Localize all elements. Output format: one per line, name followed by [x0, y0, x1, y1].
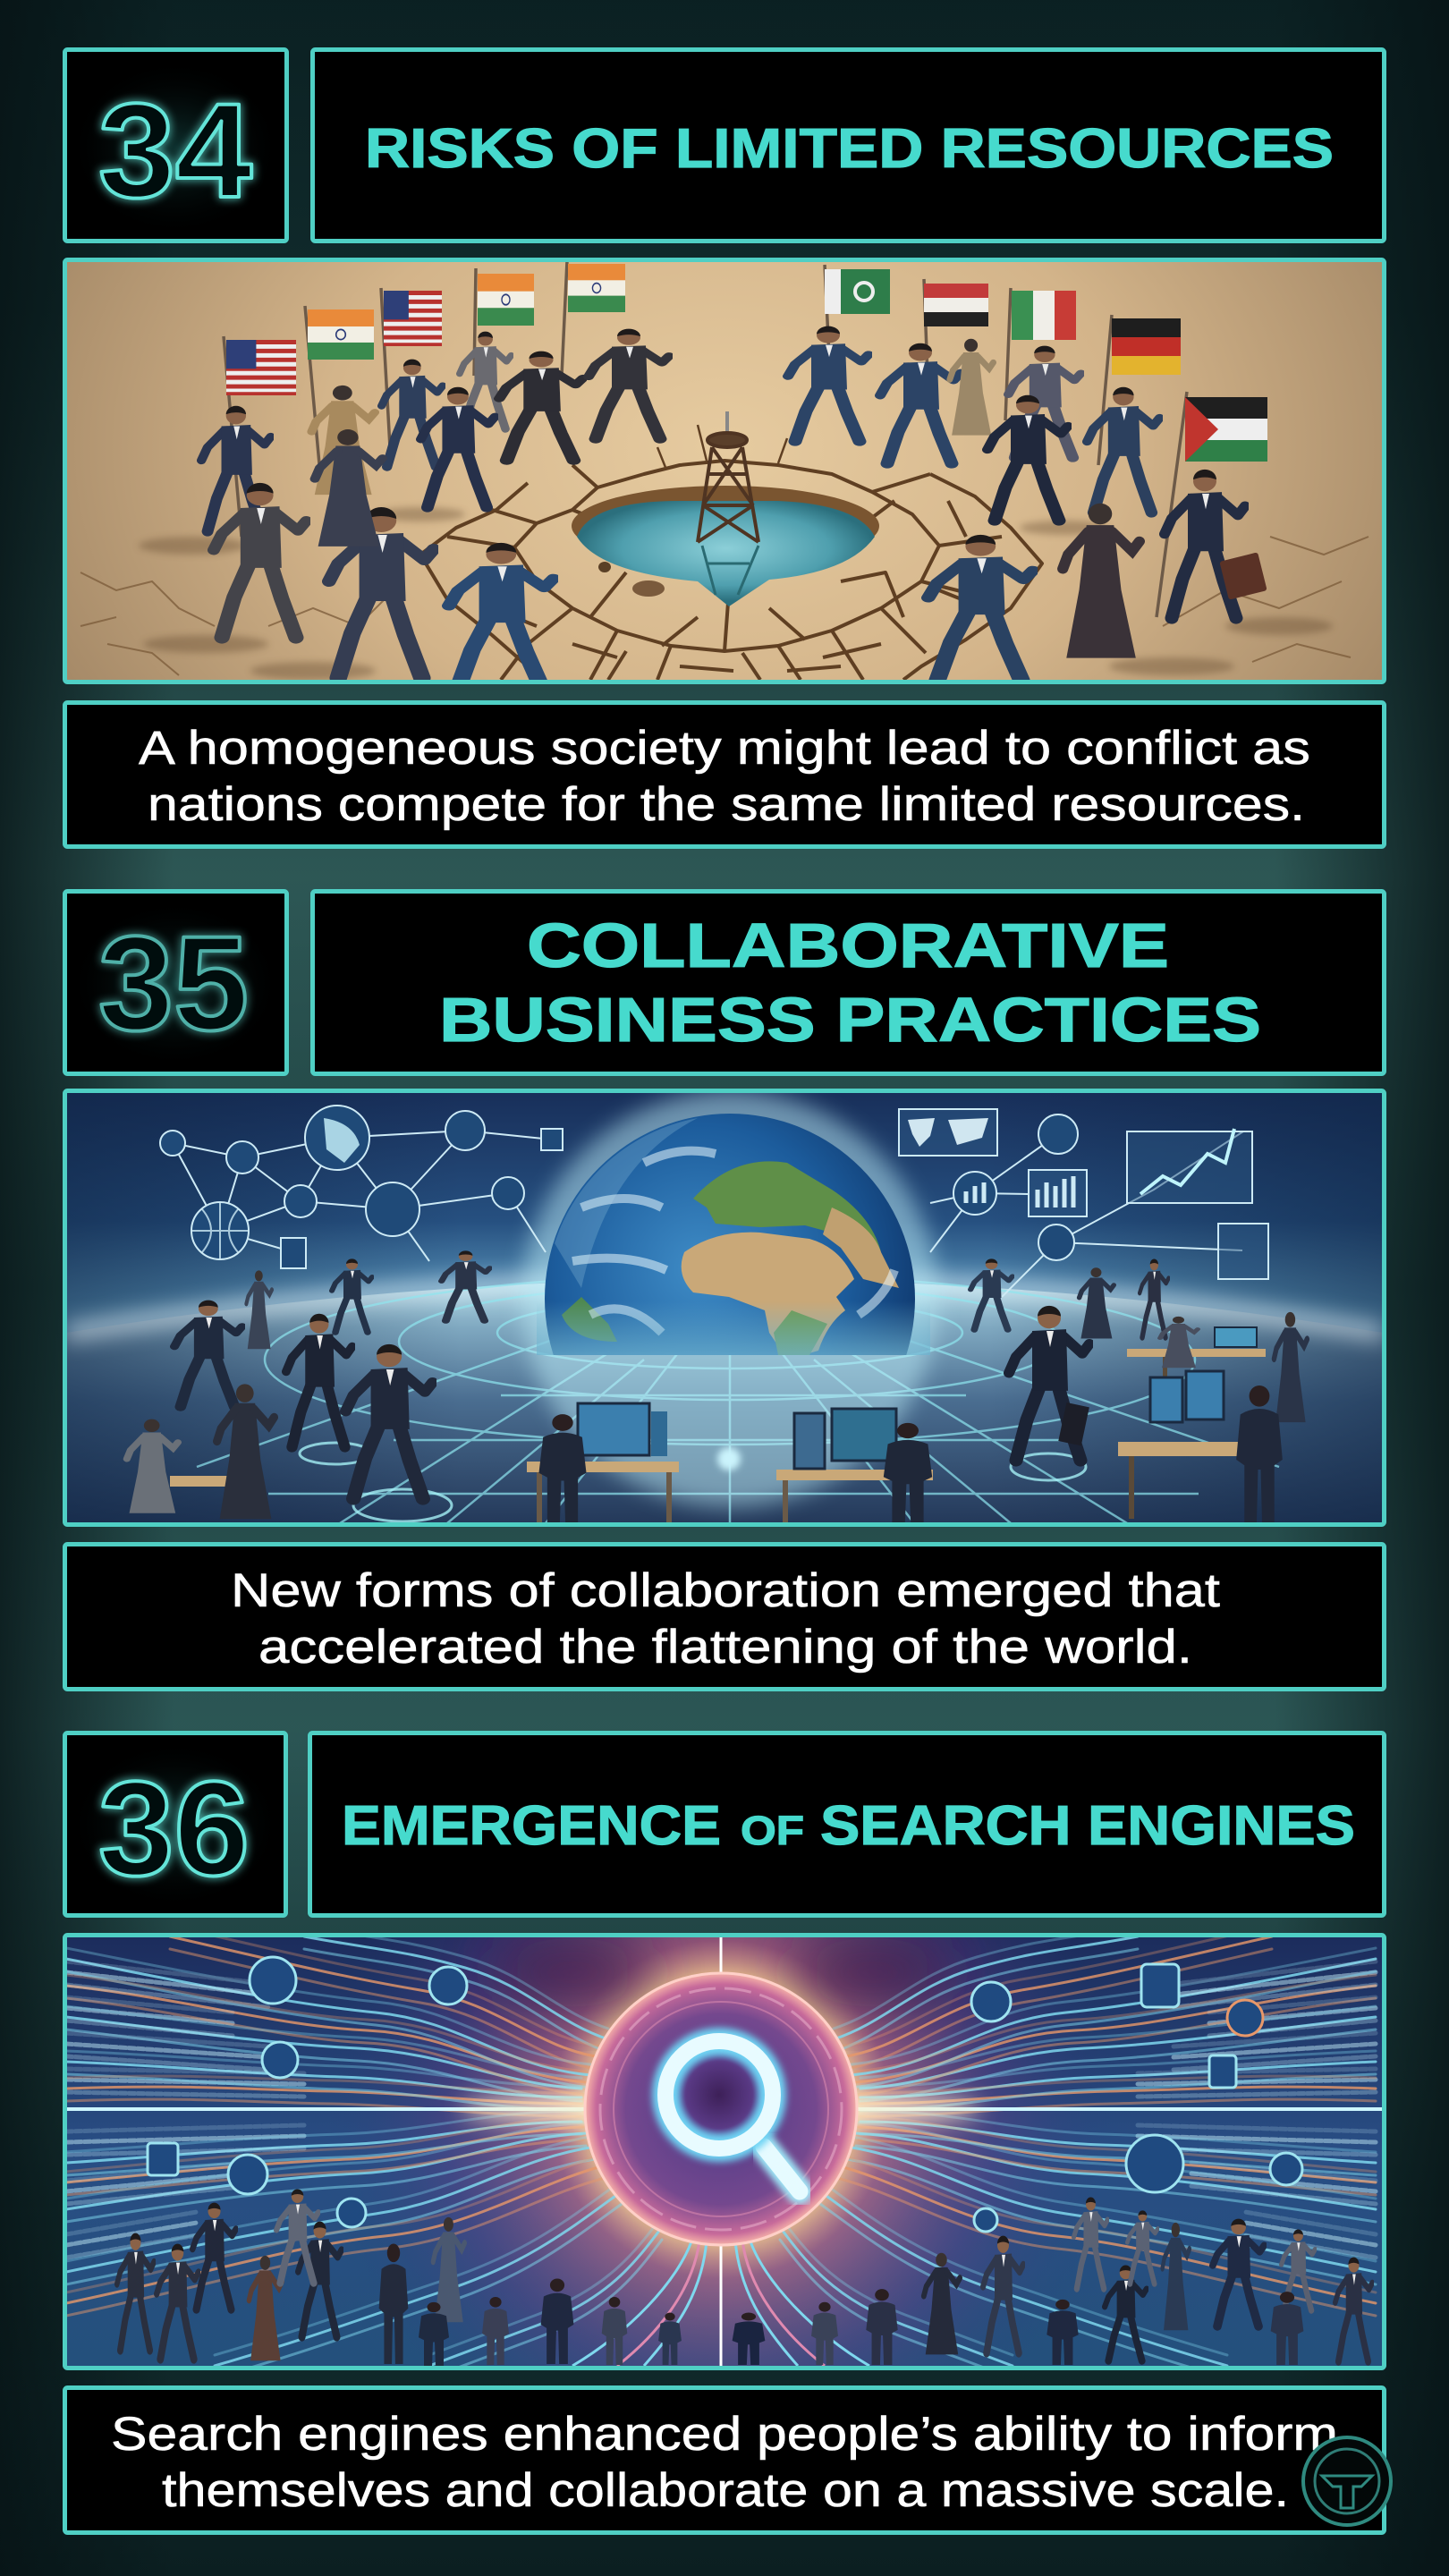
- caption box 34: [64, 703, 1385, 846]
- people confronting around the pool: [201, 326, 1267, 688]
- title box 35: COLLABORATIVE: [527, 911, 1169, 980]
- ground cracks: [420, 425, 1042, 680]
- section 34: risks of limited resources: [64, 50, 1385, 846]
- globe: [537, 1114, 930, 1355]
- floating icons: [148, 1957, 1302, 2232]
- caption box 34: A homogeneous society might lead to conflict as: [139, 722, 1310, 775]
- title box 34: RISKS OF LIMITED RESOURCES: [365, 118, 1334, 180]
- plum shadows above the ring: [492, 1936, 953, 2008]
- flags of competing nations: [226, 264, 1267, 462]
- desks and monitors: [170, 1327, 1266, 1523]
- title box 34: [313, 50, 1385, 242]
- horizontal flare: [66, 2091, 1383, 2127]
- radial glow: [327, 1716, 1114, 2503]
- title box 36: [309, 1733, 1385, 1916]
- number box 36: 36: [98, 1753, 250, 1903]
- number box 35: [64, 891, 286, 1073]
- number box 34: 34: [98, 75, 252, 225]
- illustration: nations fighting over water: [64, 259, 1385, 688]
- crowd looking at the search icon: [117, 2190, 1372, 2368]
- title box 36: OF: [741, 1808, 804, 1853]
- illustration: search engine magnifier burst: [64, 1716, 1385, 2503]
- caption box 36: [64, 2388, 1385, 2533]
- caption box 36: Search engines enhanced people’s ability to inform: [111, 2408, 1338, 2461]
- business people: [127, 1250, 1307, 1523]
- title box 36: EMERGENCE: [342, 1795, 721, 1857]
- network nodes and charts right: [899, 1109, 1268, 1297]
- shadows: [139, 507, 1333, 680]
- logo badge: [1303, 2437, 1391, 2525]
- title box 35: BUSINESS PRACTICES: [439, 985, 1261, 1055]
- caption box 34: nations compete for the same limited resources.: [148, 778, 1305, 831]
- network nodes left: [160, 1106, 563, 1268]
- caption box 35: New forms of collaboration emerged that: [231, 1564, 1220, 1617]
- curved planet floor: [66, 1279, 1383, 1523]
- illustration: global collaboration: [64, 1091, 1385, 1524]
- halo ring disc: [585, 1973, 857, 2245]
- flag poles: [224, 261, 1187, 617]
- light streams both sides: [66, 1926, 1376, 2378]
- section 36: emergence of search engines: [64, 1716, 1385, 2533]
- number box 36: [64, 1733, 286, 1916]
- dry sand ground: [66, 261, 1383, 681]
- caption box 35: [64, 1544, 1385, 1689]
- number box 35: 35: [98, 908, 249, 1058]
- section 35: collaborative business practices: [64, 891, 1385, 1689]
- number box 34: [64, 50, 286, 242]
- caption box 36: themselves and collaborate on a massive scale.: [162, 2464, 1289, 2517]
- perspective floor grid: [197, 1275, 1279, 1523]
- magnifying glass icon: [665, 2041, 800, 2191]
- title box 35: [313, 891, 1385, 1073]
- continents: [682, 1233, 854, 1360]
- oil derrick tower: [698, 411, 758, 595]
- sky: [67, 1093, 1382, 1333]
- title box 36: SEARCH ENGINES: [820, 1795, 1355, 1857]
- caption box 35: accelerated the flattening of the world.: [258, 1621, 1192, 1674]
- globe halo: [522, 1091, 937, 1506]
- water pool: [572, 486, 879, 606]
- central beams: [572, 1936, 869, 2366]
- deep blue backdrop: [66, 1936, 1383, 2366]
